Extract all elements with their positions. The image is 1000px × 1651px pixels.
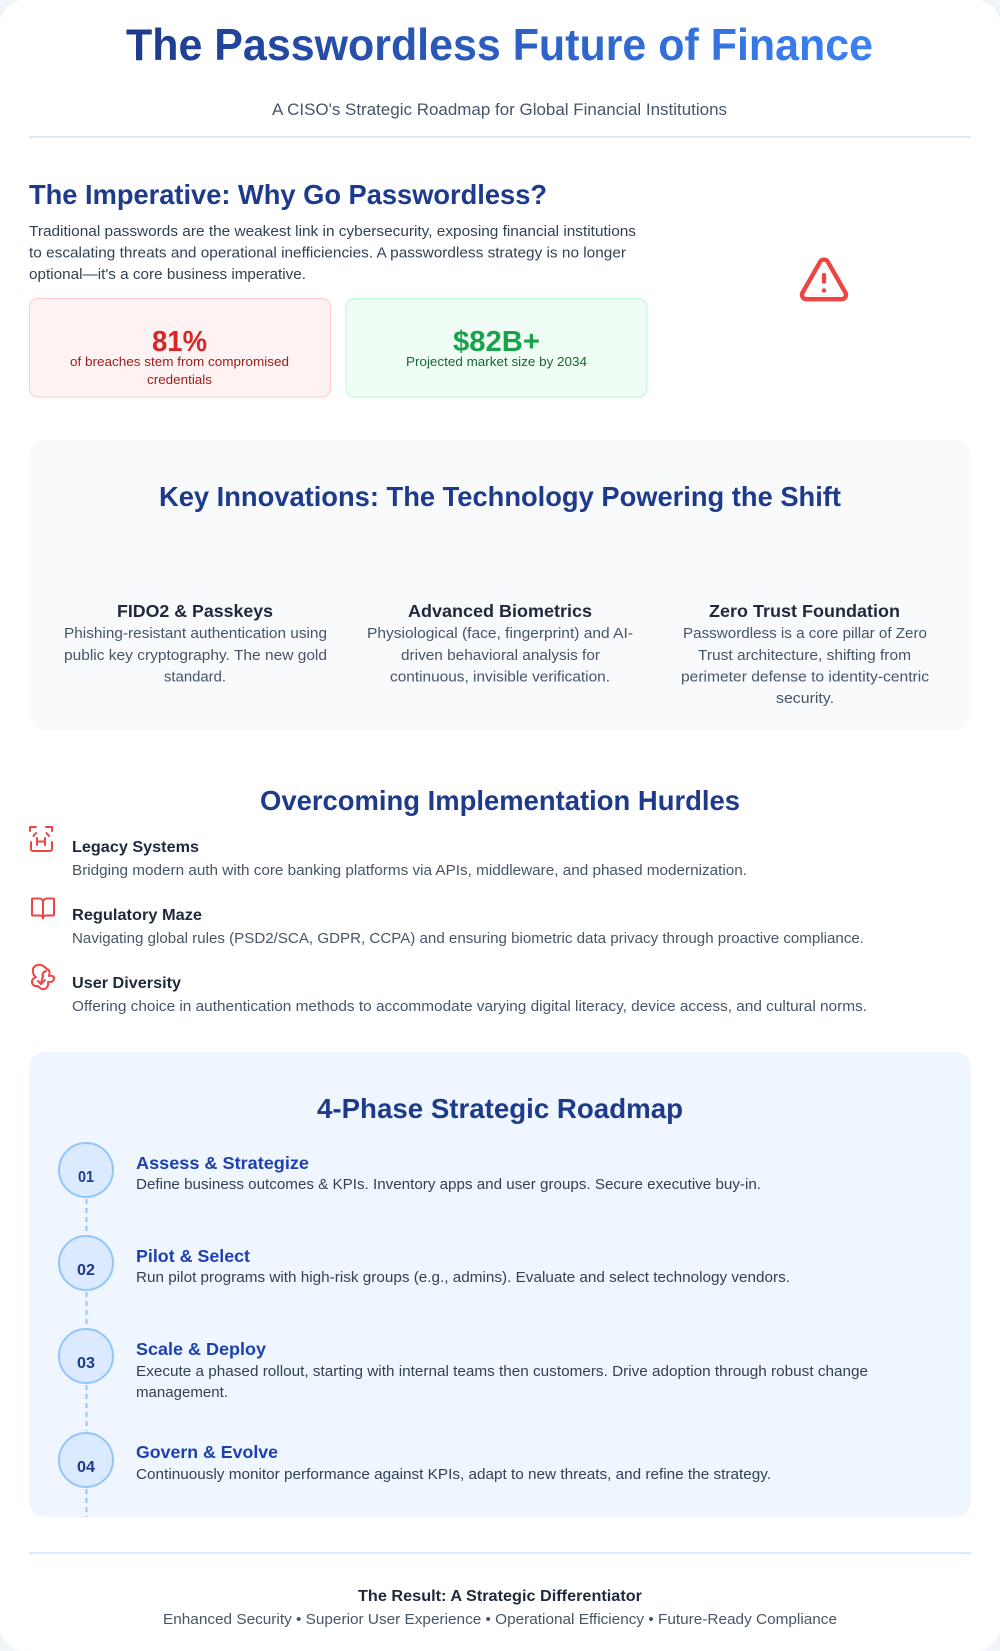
imperative paragraph xyxy=(29,223,636,283)
icon: open book xyxy=(32,898,54,918)
phase 04 xyxy=(59,1433,771,1487)
hurdle: user diversity: User Diversity xyxy=(72,975,181,992)
column: zero trust: perimeter defense to identity-centric xyxy=(681,670,929,686)
panel: key innovations xyxy=(29,440,971,730)
column: zero trust: Trust architecture, shifting from xyxy=(698,648,911,664)
phase 02: Pilot & Select xyxy=(136,1246,250,1266)
phase 02: 02 xyxy=(77,1262,95,1279)
hurdle: user diversity xyxy=(32,965,867,1015)
column: FIDO2 xyxy=(64,601,327,686)
panel: the imperative xyxy=(29,179,846,397)
hurdle: regulatory maze: Navigating global rules (PSD2/SCA, GDPR, CCPA) and ensuring biometric data privacy through proactive compliance. xyxy=(72,931,864,947)
phase 02 xyxy=(59,1236,790,1290)
footer benefits: Enhanced Security • Superior User Experience • Operational Efficiency • Future-Ready Compliance xyxy=(163,1612,837,1628)
imperative paragraph: optional—it's a core business imperative. xyxy=(29,266,306,283)
phase 01: Assess & Strategize xyxy=(136,1153,309,1173)
subtitle: A CISO's Strategic Roadmap for Global Financial Institutions xyxy=(272,100,727,119)
hurdle: regulatory maze: Regulatory Maze xyxy=(72,907,202,924)
column: biometrics xyxy=(367,601,633,686)
heading: roadmap: 4-Phase Strategic Roadmap xyxy=(317,1093,683,1124)
heading: the imperative: The Imperative: Why Go Passwordless? xyxy=(29,179,547,210)
imperative paragraph: to escalating threats and operational inefficiencies. A passwordless strategy is no longer xyxy=(29,244,626,262)
hurdle: user diversity: Offering choice in authentication methods to accommodate varying digital literacy, device access, and cultural norms. xyxy=(72,999,867,1015)
column: biometrics: continuous, invisible verification. xyxy=(390,670,610,686)
column: FIDO2: public key cryptography. The new gold xyxy=(64,648,327,664)
hurdle: legacy systems xyxy=(30,827,747,879)
phase 04: 04 xyxy=(77,1459,95,1476)
icon: legacy systems xyxy=(30,827,52,851)
phase 03 xyxy=(59,1329,868,1401)
panel: implementation hurdles xyxy=(30,785,867,1015)
stat card: 81%: 81% xyxy=(152,326,207,358)
column: FIDO2: FIDO2 & Passkeys xyxy=(117,601,273,621)
phase 01: Define business outcomes & KPIs. Inventory apps and user groups. Secure executive buy-in. xyxy=(136,1177,761,1193)
column: FIDO2: Phishing-resistant authentication using xyxy=(64,626,327,642)
hurdle: regulatory maze xyxy=(32,898,864,947)
column: biometrics: Advanced Biometrics xyxy=(408,601,592,621)
hurdle: legacy systems: Bridging modern auth with core banking platforms via APIs, middleware, and phased modernization. xyxy=(72,863,747,879)
footer heading: The Result: A Strategic Differentiator xyxy=(358,1588,642,1605)
phase 01: 01 xyxy=(78,1169,94,1186)
icon: warning triangle xyxy=(802,260,846,299)
phase 04: Continuously monitor performance against KPIs, adapt to new threats, and refine the strategy. xyxy=(136,1467,771,1483)
footer xyxy=(29,1552,971,1628)
icon: user diversity xyxy=(32,965,54,989)
phase 01 xyxy=(59,1143,761,1197)
stat card: $82B+ xyxy=(346,298,647,397)
stat card: 81%: of breaches stem from compromised xyxy=(70,354,289,369)
stat card: 81%: credentials xyxy=(147,372,213,387)
phase 03: Scale & Deploy xyxy=(136,1339,266,1359)
phase 04: Govern & Evolve xyxy=(136,1442,278,1462)
column: zero trust: Passwordless is a core pillar of Zero xyxy=(683,626,927,642)
phase 03: 03 xyxy=(77,1355,95,1372)
stat card: $82B+: Projected market size by 2034 xyxy=(406,354,587,369)
stat card: 81% xyxy=(30,298,330,397)
phase 03: Execute a phased rollout, starting with internal teams then customers. Drive adoption through robust change xyxy=(136,1364,868,1380)
header xyxy=(29,20,971,138)
column: biometrics: driven behavioral analysis for xyxy=(401,648,600,664)
column: FIDO2: standard. xyxy=(164,670,226,686)
imperative paragraph: Traditional passwords are the weakest link in cybersecurity, exposing financial institutions xyxy=(29,223,636,240)
panel: strategic roadmap xyxy=(29,1052,971,1517)
column: zero trust: Zero Trust Foundation xyxy=(709,601,900,621)
phase 02: Run pilot programs with high-risk groups (e.g., admins). Evaluate and select technology vendors. xyxy=(136,1270,790,1286)
timeline connector xyxy=(86,1199,88,1517)
title: The Passwordless Future of Finance xyxy=(126,20,873,70)
column: biometrics: Physiological (face, fingerprint) and AI- xyxy=(367,626,633,642)
column: zero trust: security. xyxy=(776,691,834,707)
heading: key innovations: Key Innovations: The Technology Powering the Shift xyxy=(159,481,841,512)
hurdle: legacy systems: Legacy Systems xyxy=(72,839,199,856)
phase 03: management. xyxy=(136,1385,228,1401)
column: zero trust xyxy=(681,601,929,707)
heading: hurdles: Overcoming Implementation Hurdles xyxy=(260,785,740,816)
stat card: $82B+: $82B+ xyxy=(453,326,540,358)
